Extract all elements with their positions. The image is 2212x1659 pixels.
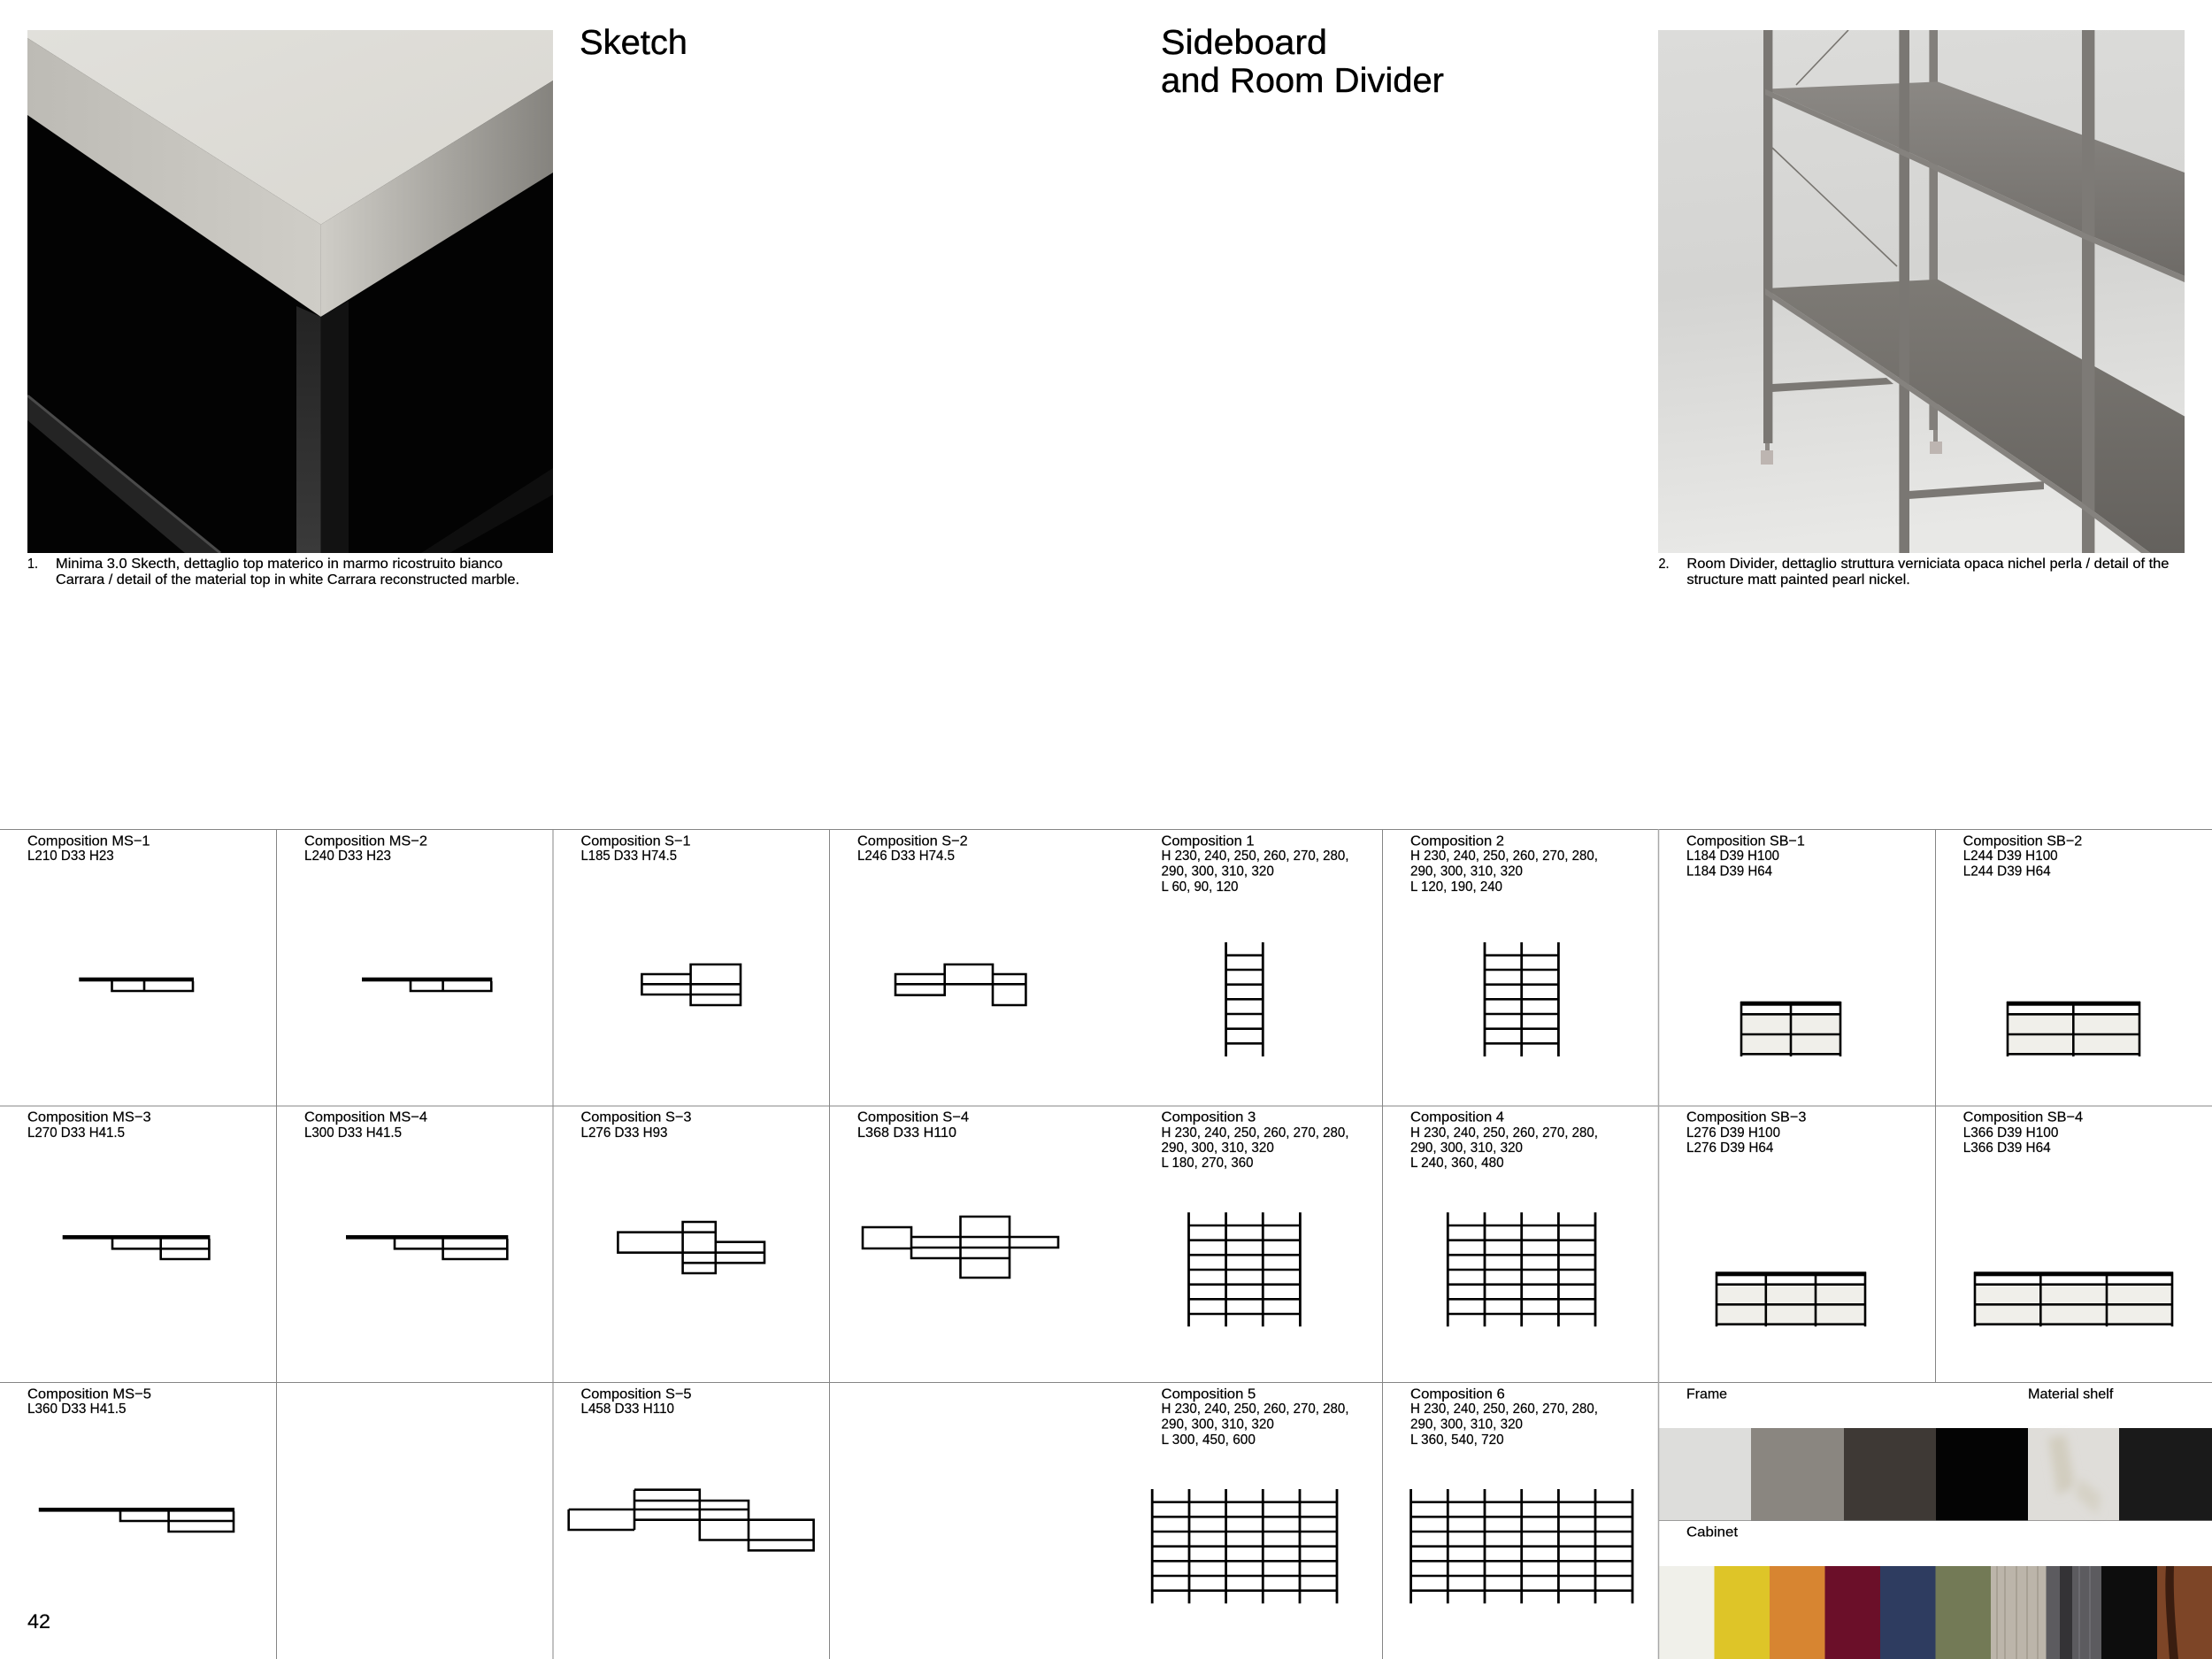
cell: Composition SB-3 [1686,1110,1866,1326]
photo: room divider structure detail [1658,30,2185,553]
table grid lines [0,829,2212,1659]
label: Composition S−5 [580,1387,692,1402]
label: Composition 1 [1161,833,1255,849]
label: H 230, 240, 250, 260, 270, 280, [1410,1125,1598,1141]
label: L366 D39 H100 [1963,1125,2058,1141]
label: Composition 5 [1161,1387,1256,1402]
caption 2 [1658,557,2170,588]
drawing [1716,1271,1866,1326]
label: Composition S−3 [580,1110,692,1125]
label [1410,1387,1598,1448]
label: H 230, 240, 250, 260, 270, 280, [1161,1402,1348,1417]
page number: 42 [27,1610,50,1632]
drawing [895,964,1025,1005]
drawing [863,1217,1058,1278]
drawing [79,978,194,991]
label: L276 D33 H93 [580,1125,668,1141]
label: L 300, 450, 600 [1161,1432,1256,1448]
label: Composition MS−3 [27,1110,151,1125]
caption 2: Room Divider, dettaglio struttura verniciata opaca nichel perla / detail of the [1686,557,2170,572]
label: L184 D39 H64 [1686,864,1772,879]
label [27,1387,151,1417]
label [580,1387,692,1417]
cell: Composition 2 [1410,833,1598,1056]
label: Cabinet: Cabinet [1686,1525,1739,1540]
caption 1: Minima 3.0 Skecth, dettaglio top materico in marmo ricostruito bianco [56,557,503,572]
label: L185 D33 H74.5 [580,849,677,864]
label: L184 D39 H100 [1686,849,1779,864]
label [580,1110,692,1141]
label [857,1110,969,1141]
title: Sketch: Sketch [580,24,687,62]
label [27,1110,151,1141]
label [1963,833,2082,879]
cell: Composition S-1 [580,833,741,1005]
drawing [1485,942,1558,1056]
swatches: frame and material shelf [1659,1428,2212,1521]
title: Sideboard and Room Divider [1161,24,1444,100]
drawing [362,978,492,991]
drawing [641,964,741,1005]
cell: Composition 4 [1410,1110,1598,1326]
label: 290, 300, 310, 320 [1161,1417,1274,1432]
label: 290, 300, 310, 320 [1161,864,1274,879]
drawing [346,1235,508,1259]
drawing [569,1490,814,1550]
label: L 60, 90, 120 [1161,879,1239,895]
label [580,833,691,864]
label: L300 D33 H41.5 [304,1125,402,1141]
label: Composition SB−1 [1686,833,1805,849]
label: Material shelf: Material shelf [2028,1387,2114,1402]
caption 2: structure matt painted pearl nickel. [1686,572,1910,588]
label: Composition 4 [1410,1110,1504,1125]
label [27,833,150,864]
label [1686,833,1805,879]
drawing [63,1235,210,1259]
label: Composition S−4 [857,1110,969,1125]
label: L246 D33 H74.5 [857,849,955,864]
cell: Composition MS-1 [27,833,194,991]
drawing [1448,1212,1595,1326]
label: Composition MS−2 [304,833,427,849]
caption 1: 1. [27,557,38,572]
drawing [618,1222,764,1273]
cell: Composition 5 [1152,1387,1348,1603]
cell: Composition S-2 [857,833,1025,1005]
label: 290, 300, 310, 320 [1410,864,1523,879]
photo: marble top detail [27,30,553,553]
label [1410,833,1598,895]
cell: Composition 1 [1161,833,1348,1056]
cell: Composition MS-2 [304,833,492,991]
label: L366 D39 H64 [1963,1141,2051,1156]
drawing [1411,1489,1632,1603]
label [1686,1110,1806,1156]
label: L458 D33 H110 [580,1402,674,1417]
drawing [39,1508,234,1532]
cell: Composition S-5 [569,1387,814,1550]
label: Composition 3 [1161,1110,1256,1125]
label: L244 D39 H64 [1963,864,2051,879]
label [1410,1110,1598,1171]
label: Composition MS−4 [304,1110,427,1125]
label: L 240, 360, 480 [1410,1156,1504,1171]
label: 290, 300, 310, 320 [1161,1141,1274,1156]
swatches: cabinet [1659,1566,2212,1659]
label: H 230, 240, 250, 260, 270, 280, [1161,1125,1348,1141]
label [304,1110,427,1141]
caption 1 [27,557,519,588]
label: Composition SB−3 [1686,1110,1806,1125]
label: Composition MS−1 [27,833,150,849]
cell: Composition S-4 [857,1110,1058,1278]
cell: Composition SB-1 [1686,833,1840,1056]
cell: Composition 3 [1161,1110,1348,1326]
label: L276 D39 H64 [1686,1141,1773,1156]
label: Composition S−2 [857,833,968,849]
cell: Composition SB-2 [1963,833,2140,1056]
label: L244 D39 H100 [1963,849,2058,864]
title: Sideboard and Room Divider: and Room Divider [1161,62,1444,100]
caption 1: Carrara / detail of the material top in white Carrara reconstructed marble. [56,572,519,588]
caption 2: 2. [1658,557,1669,572]
label: 290, 300, 310, 320 [1410,1141,1523,1156]
label: L270 D33 H41.5 [27,1125,125,1141]
label: Frame: Frame [1686,1387,1727,1402]
cell: Composition S-3 [580,1110,764,1273]
label: H 230, 240, 250, 260, 270, 280, [1410,1402,1598,1417]
label: Composition MS−5 [27,1387,151,1402]
cell: Composition 6 [1410,1387,1632,1603]
label [1161,1387,1348,1448]
cell: Composition SB-4 [1963,1110,2173,1326]
cell: Composition MS-3 [27,1110,210,1259]
label: Composition 6 [1410,1387,1505,1402]
label [304,833,427,864]
label: L276 D39 H100 [1686,1125,1780,1141]
title: Sideboard and Room Divider: Sideboard [1161,24,1327,62]
label [1161,1110,1348,1171]
label: H 230, 240, 250, 260, 270, 280, [1410,849,1598,864]
label: L 180, 270, 360 [1161,1156,1254,1171]
label: L 360, 540, 720 [1410,1432,1504,1448]
drawing [2007,1002,2140,1056]
label: L 120, 190, 240 [1410,879,1502,895]
label: L240 D33 H23 [304,849,391,864]
drawing [1974,1271,2173,1326]
label: L210 D33 H23 [27,849,114,864]
label: Composition 2 [1410,833,1504,849]
label: Composition SB−4 [1963,1110,2083,1125]
drawing [1152,1489,1337,1603]
drawing [1740,1002,1840,1056]
label: L368 D33 H110 [857,1125,956,1141]
cell: Composition MS-4 [304,1110,508,1259]
label: H 230, 240, 250, 260, 270, 280, [1161,849,1348,864]
drawing [1189,1212,1300,1326]
cell: Composition MS-5 [27,1387,234,1532]
label: Composition SB−2 [1963,833,2082,849]
label [857,833,968,864]
drawing [1226,942,1263,1056]
label: Composition S−1 [580,833,691,849]
label: 290, 300, 310, 320 [1410,1417,1523,1432]
label: L360 D33 H41.5 [27,1402,127,1417]
label [1963,1110,2083,1156]
label [1161,833,1348,895]
